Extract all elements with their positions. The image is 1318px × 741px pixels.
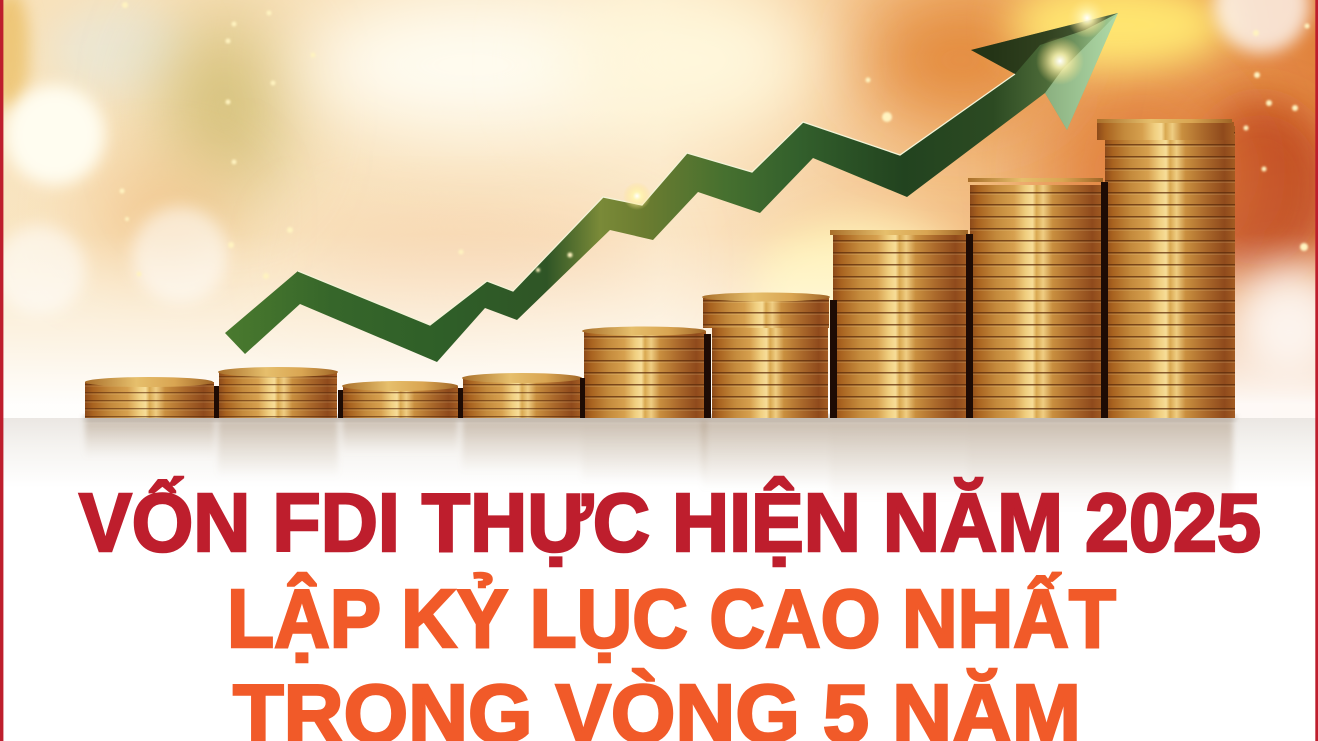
title	[79, 476, 1261, 741]
coin stack 3	[342, 381, 458, 418]
side border: left	[0, 0, 3, 741]
coin stack 7	[830, 230, 968, 418]
title line 1: VỐN FDI THỰC HIỆN NĂM 2025	[79, 476, 1261, 569]
coin stack 1	[85, 377, 214, 418]
side border: right	[1315, 0, 1318, 741]
coin stack 5	[582, 326, 706, 418]
coin stack 6	[702, 292, 830, 418]
coin stack 9	[1097, 119, 1235, 418]
green growth arrow	[225, 0, 1118, 362]
floor with coin reflections	[0, 415, 1318, 510]
coin stack 8	[968, 178, 1103, 418]
dark gaps between stacks	[214, 182, 1108, 418]
coin stack 2	[218, 367, 338, 418]
coin stack 4	[462, 373, 582, 418]
title line 2: LẬP KỶ LỤC CAO NHẤT	[227, 571, 1116, 665]
sparkles	[120, 2, 1310, 279]
coin stacks rising left to right	[85, 119, 1235, 418]
